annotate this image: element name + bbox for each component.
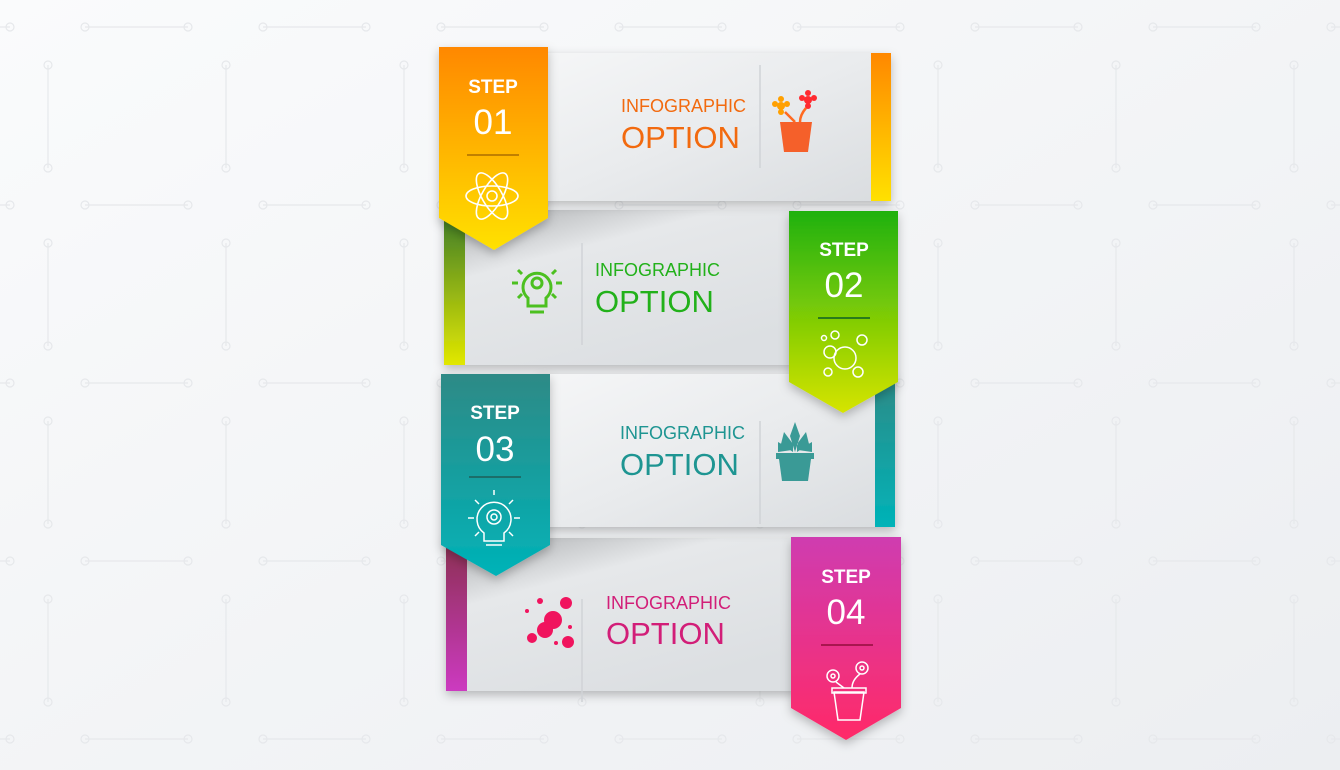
- text: option 3: INFOGRAPHIC: [620, 423, 745, 443]
- text: option 4: [582, 593, 731, 702]
- text: option 2: INFOGRAPHIC: [595, 260, 720, 280]
- panel: step 4 card: [446, 538, 796, 691]
- icon: flower pot orange: [772, 90, 817, 152]
- panel: step 2 card: [444, 210, 794, 365]
- ribbon: step 01: STEP: [468, 77, 518, 98]
- panel: step 1 card: [540, 53, 891, 201]
- icon: succulent pot teal: [776, 422, 814, 481]
- text: option 1: [621, 65, 760, 168]
- text: option 3: [620, 421, 760, 524]
- text: option 1: INFOGRAPHIC: [621, 96, 746, 116]
- ribbon: step 04: STEP: [821, 567, 871, 588]
- ribbon: step 02: 02: [825, 266, 863, 305]
- text: option 1: OPTION: [621, 120, 740, 155]
- text: option 2: OPTION: [595, 284, 714, 319]
- icon: flower pot outline: [827, 662, 868, 720]
- ribbon: step 04: [791, 537, 901, 740]
- ribbon: step 03: STEP: [470, 403, 520, 424]
- ribbon: step 03: [441, 374, 550, 576]
- icon: bubbles magenta: [525, 597, 574, 648]
- text: option 2: [582, 243, 720, 345]
- text: option 3: OPTION: [620, 447, 739, 482]
- panel: step 3 card: [540, 374, 895, 527]
- icon: bubbles outline: [822, 331, 867, 377]
- ribbon: step 01: 01: [474, 103, 512, 142]
- ribbon: step 02: [789, 211, 898, 413]
- text: option 4: OPTION: [606, 616, 725, 651]
- text: option 4: INFOGRAPHIC: [606, 593, 731, 613]
- icon: lightbulb green: [512, 270, 562, 312]
- icon: atom: [466, 168, 518, 224]
- ribbon: step 02: STEP: [819, 240, 869, 261]
- ribbon: step 01: [439, 47, 548, 250]
- ribbon: step 04: 04: [827, 593, 865, 632]
- ribbon: step 03: 03: [476, 430, 514, 469]
- icon: bulb with gear: [468, 490, 520, 545]
